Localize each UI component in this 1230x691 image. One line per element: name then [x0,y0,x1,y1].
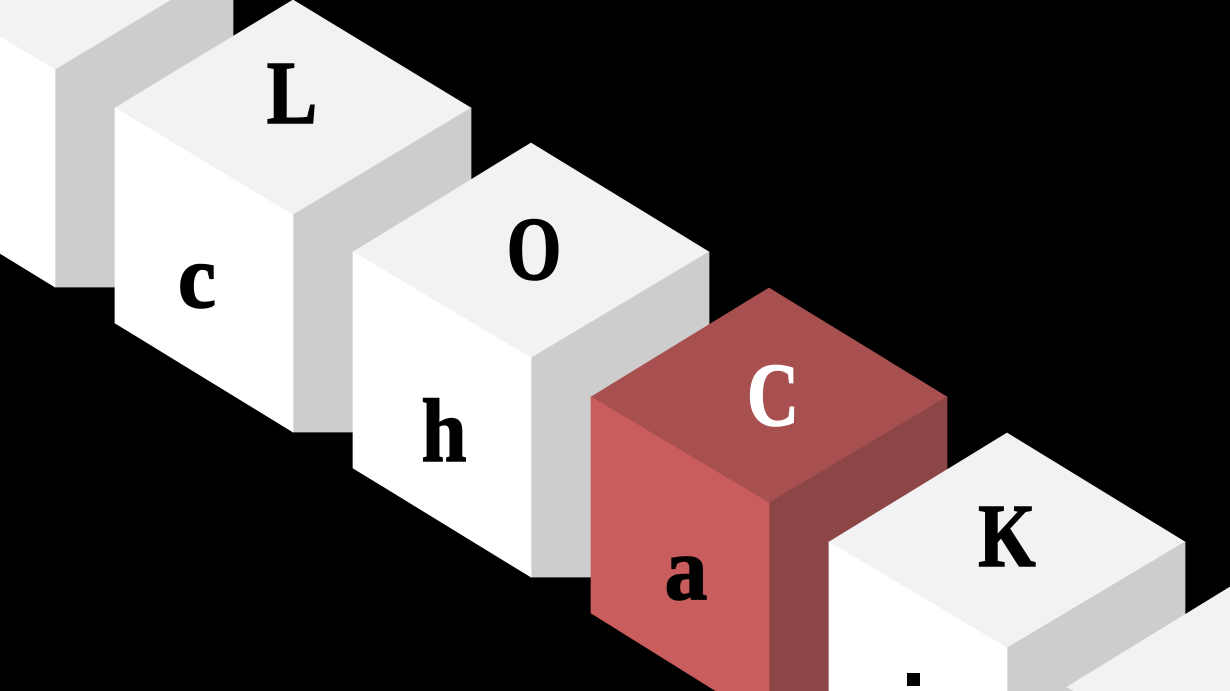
letter c: c [178,227,216,326]
letter C: C [747,344,799,445]
cube 2: L and c [115,0,471,432]
letter h: h [421,381,467,481]
letter a: a [665,519,707,618]
letter O: O [507,200,561,299]
cube 6: cropped white cube [1067,587,1230,691]
cube 4: highlighted red cube with C and a [591,288,947,691]
cube 5: K and cropped lower letter [829,433,1185,691]
cube 1: partially cropped white cube [0,0,233,287]
letter K: K [978,486,1036,586]
letter L: L [267,43,317,142]
cube 3: O and h [353,143,709,577]
